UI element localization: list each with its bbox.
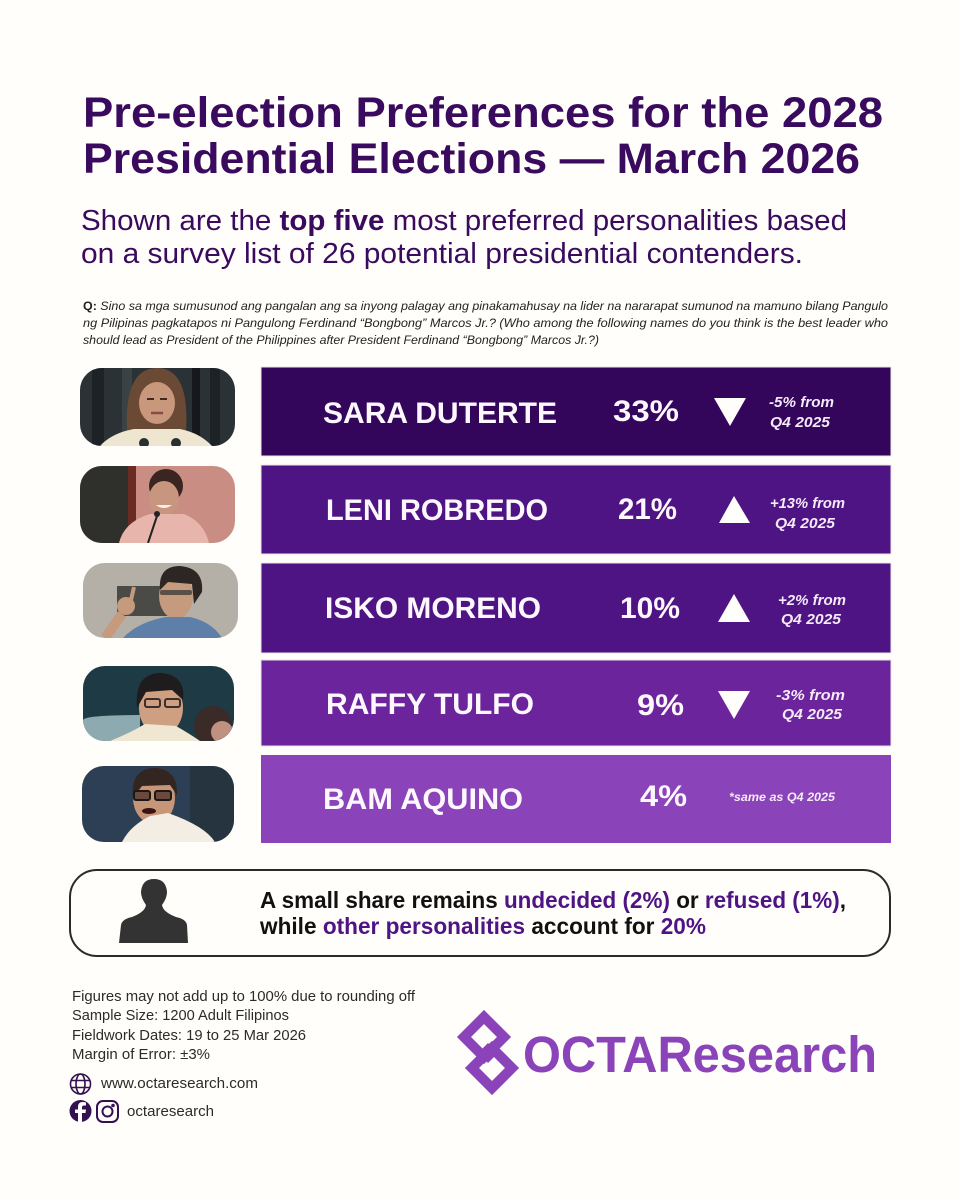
social handle: octaresearch [127,1104,214,1120]
title: Presidential Elections — March 2026 [83,135,860,183]
methodology notes: Sample Size: 1200 Adult Filipinos [72,1008,289,1024]
change note: Q4 2025 [782,707,843,723]
change note: -5% from [769,395,834,411]
callout text: while other personalities account for 20% [259,913,706,939]
name: BAM AQUINO [323,783,523,816]
photo: Raffy Tulfo [83,666,234,746]
percentage: 4% [640,780,687,813]
change note: +13% from [770,496,845,512]
bar: Sara Duterte [261,367,891,456]
icon: down arrow [714,398,746,426]
icon: up arrow [718,594,750,622]
icon: facebook [70,1100,92,1122]
change note [770,496,845,532]
subtitle: on a survey list of 26 potential presidential contenders. [81,238,803,270]
percentage: 9% [637,689,684,722]
percentage: 10% [620,592,680,625]
logo wordmark: OCTAResearch [523,1026,877,1083]
logo: OCTA Research [464,1017,877,1088]
photo: Bam Aquino [82,766,234,842]
methodology notes: Figures may not add up to 100% due to rounding off [72,989,416,1005]
icon: person silhouette [119,879,188,943]
survey question: ng Pilipinas pagkatapos ni Pangulong Ferdinand “Bongbong” Marcos Jr.? (Who among the following names do you think is the best leader who [83,318,889,330]
bar: Raffy Tulfo [261,660,891,746]
change note [776,688,845,723]
icon: instagram [97,1101,118,1122]
icon: down arrow [718,691,750,719]
change note [778,593,846,628]
bar: Leni Robredo [261,465,891,554]
change note: *same as Q4 2025 [729,792,836,804]
methodology notes: Margin of Error: ±3% [72,1047,210,1063]
icon: globe [70,1074,90,1094]
callout text: A small share remains undecided (2%) or refused (1%), [260,887,846,913]
methodology notes [72,989,416,1063]
bar: Isko Moreno [261,563,891,653]
survey question: Q: Sino sa mga sumusunod ang pangalan ang sa inyong palagay ang pinakamahusay na lider na nararapat sumunod na mamuno bilang Pangulo [83,301,889,313]
title [83,89,883,183]
change note: -3% from [776,688,845,704]
photo: Leni Robredo [80,466,235,543]
subtitle: Shown are the top five most preferred personalities based [81,205,847,237]
percentage: 33% [613,395,679,428]
name: LENI ROBREDO [326,494,548,527]
change note [769,395,834,431]
callout text [259,887,846,939]
change note: Q4 2025 [775,516,836,532]
callout: undecided and refused [70,870,890,956]
survey question: should lead as President of the Philippines after President Ferdinand “Bongbong” Marcos Jr.?) [83,335,599,347]
methodology notes: Fieldwork Dates: 19 to 25 Mar 2026 [72,1028,306,1044]
percentage: 21% [618,493,677,526]
change note: +2% from [778,593,846,609]
icon: logo diamonds [464,1017,512,1088]
bar: Bam Aquino [261,755,891,843]
change note: Q4 2025 [770,415,831,431]
title: Pre-election Preferences for the 2028 [83,89,883,137]
name: RAFFY TULFO [326,688,534,721]
photo: Sara Duterte [80,368,235,448]
subtitle [81,205,847,270]
website: www.octaresearch.com [100,1076,258,1092]
survey question [83,301,889,347]
change note: Q4 2025 [781,612,842,628]
name: ISKO MORENO [325,592,541,625]
photo: Isko Moreno [83,563,238,638]
icon: up arrow [719,496,750,523]
name: SARA DUTERTE [323,397,557,430]
